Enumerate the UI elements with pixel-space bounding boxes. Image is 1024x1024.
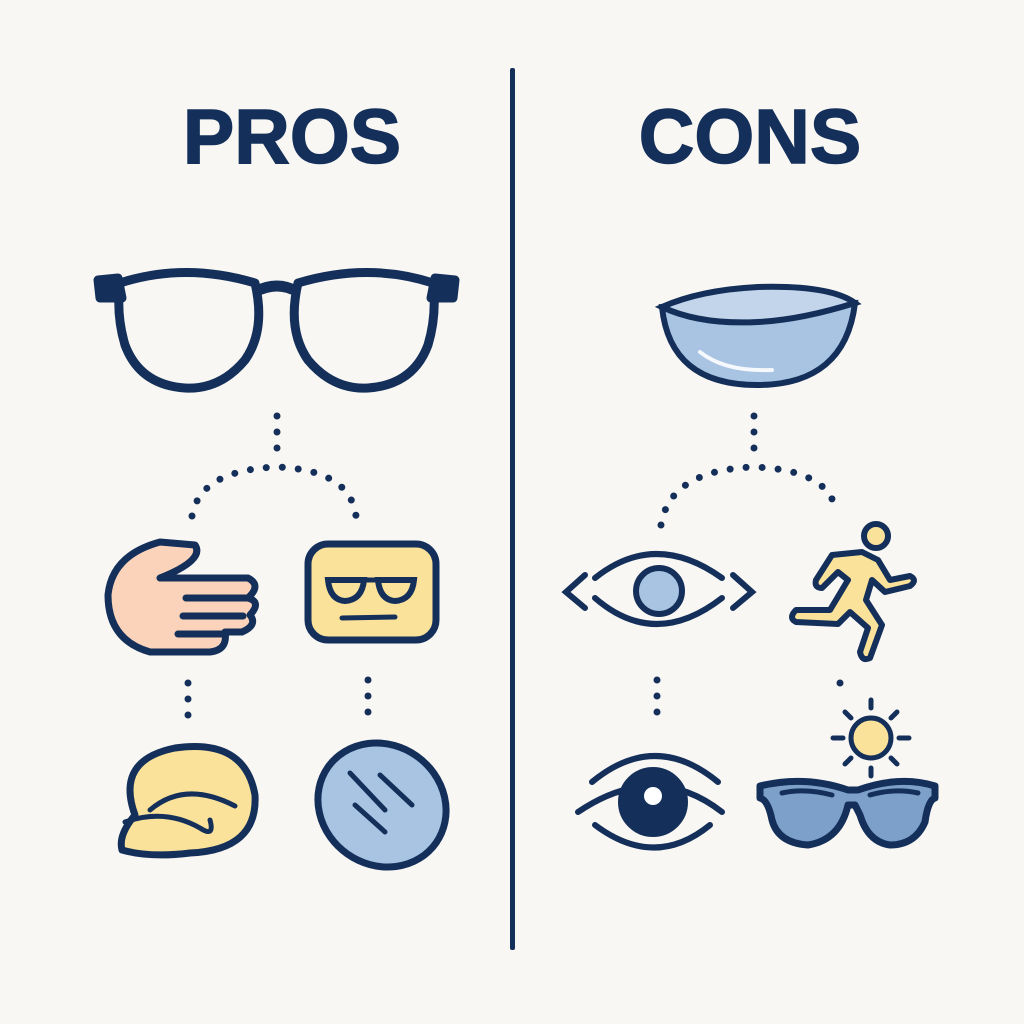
title: CONS: CONS <box>639 94 861 180</box>
icon: sunglasses <box>760 781 935 845</box>
icon: runner <box>792 524 914 659</box>
icon: sun <box>833 700 909 776</box>
icon: face with glasses <box>308 544 436 640</box>
connector dots: cons <box>657 416 840 720</box>
title: PROS: PROS <box>183 94 401 180</box>
connector dots: pros <box>188 416 368 722</box>
divider line <box>510 68 515 950</box>
icon: speech bubble <box>121 747 255 855</box>
icon: blue oval lens <box>294 718 470 892</box>
icon: eye with arrows (peripheral vision) <box>566 554 752 624</box>
icon: hand <box>108 542 256 652</box>
icon: contact lens <box>662 287 855 385</box>
icon: eyeglasses <box>98 272 455 388</box>
icon: eye <box>578 756 722 848</box>
